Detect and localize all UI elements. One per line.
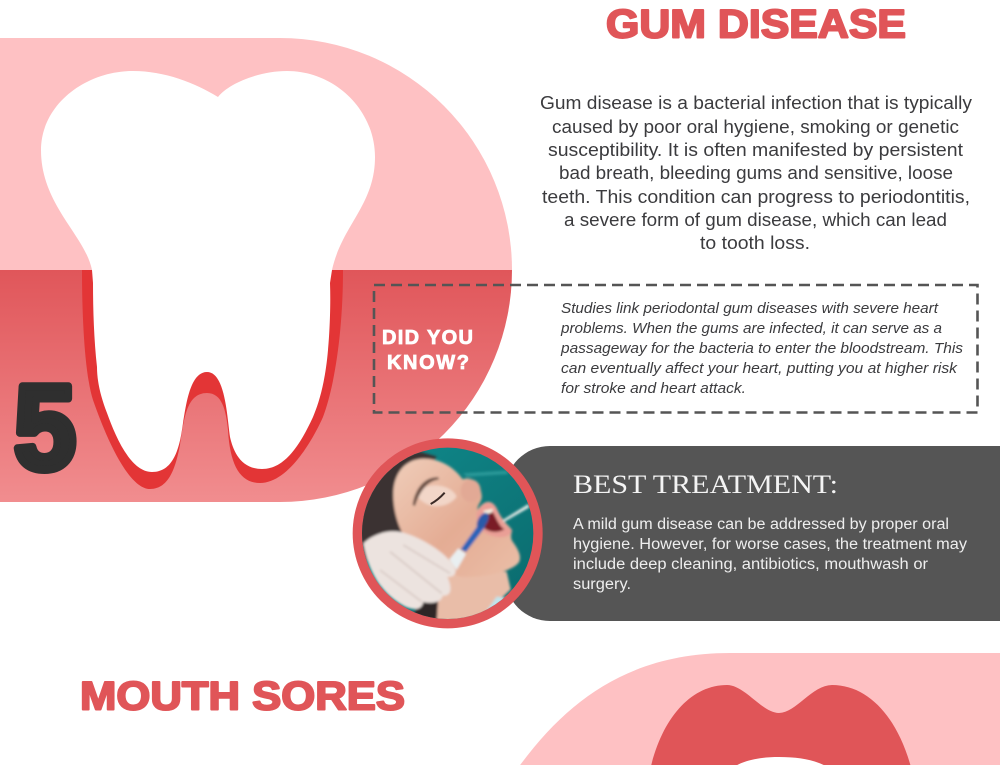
mouth xyxy=(477,502,512,537)
text block: gum disease description: Gum disease is a bacterial infection that is typically xyxy=(540,93,972,113)
callout: did you know box xyxy=(374,285,978,412)
panel: mouth background xyxy=(513,653,1000,765)
closed eye xyxy=(431,493,445,504)
callout text xyxy=(560,300,963,397)
suction tube xyxy=(461,523,485,552)
treatment text: include deep cleaning, antibiotics, mouthwash or xyxy=(573,556,928,573)
panel: tooth background xyxy=(0,38,512,502)
icon: tooth xyxy=(41,71,375,472)
hair xyxy=(357,452,437,563)
text block: gum disease description: a severe form of gum disease, which can lead xyxy=(564,210,947,230)
text block: gum disease description: bad breath, bleeding gums and sensitive, loose xyxy=(559,163,953,183)
callout heading xyxy=(382,327,473,374)
text block: gum disease description xyxy=(540,93,972,253)
treatment text: surgery. xyxy=(573,576,631,593)
mouth opening xyxy=(725,757,838,765)
neck xyxy=(437,570,511,623)
callout text: problems. When the gums are infected, it can serve as a xyxy=(560,320,942,337)
glove xyxy=(363,531,456,609)
treatment text xyxy=(573,516,967,593)
icon: lips xyxy=(649,685,913,765)
nose xyxy=(462,478,482,497)
callout text: Studies link periodontal gum diseases with severe heart xyxy=(561,300,939,317)
number 5: 5 xyxy=(14,361,76,495)
panel: best treatment xyxy=(505,446,1000,621)
text block: gum disease description: to tooth loss. xyxy=(700,233,810,253)
panel: lower gum area xyxy=(0,270,512,502)
callout text: for stroke and heart attack. xyxy=(561,380,746,397)
text block: gum disease description: caused by poor oral hygiene, smoking or genetic xyxy=(552,117,959,137)
photo: dental patient xyxy=(353,438,543,628)
eyebrow xyxy=(413,477,439,506)
title: mouth sores: MOUTH SORES xyxy=(80,674,405,718)
treatment heading: BEST TREATMENT: xyxy=(573,470,838,499)
collar xyxy=(486,596,506,610)
treatment text: hygiene. However, for worse cases, the treatment may xyxy=(573,536,967,553)
callout heading: DID YOU xyxy=(382,327,473,349)
treatment text: A mild gum disease can be addressed by proper oral xyxy=(573,516,949,533)
callout text: can eventually affect your heart, putting you at higher risk xyxy=(561,360,959,377)
panel: upper pink area xyxy=(0,38,512,270)
title: gum disease: GUM DISEASE xyxy=(606,2,906,46)
callout heading: KNOW? xyxy=(387,352,469,374)
gum outline xyxy=(82,270,343,489)
text block: gum disease description: teeth. This condition can progress to periodontitis, xyxy=(542,187,970,207)
face xyxy=(393,459,520,577)
instrument tip xyxy=(503,504,529,522)
callout text: passageway for the bacteria to enter the bloodstream. This xyxy=(560,340,963,357)
cheek light xyxy=(415,485,457,506)
text block: gum disease description: susceptibility. It is often manifested by persistent xyxy=(548,140,963,160)
